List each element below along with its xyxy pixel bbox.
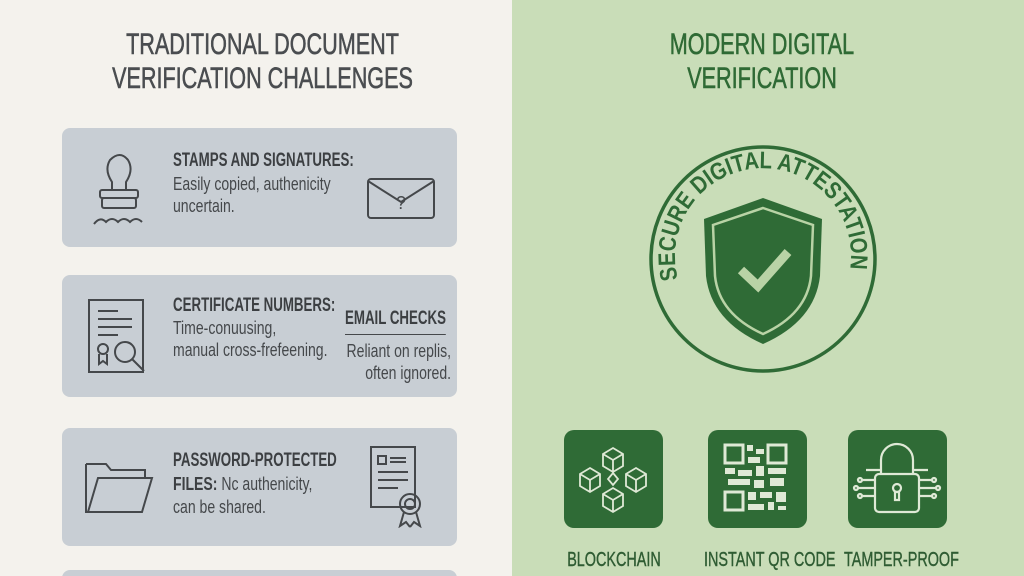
text: manual cross-frefeening.	[173, 340, 328, 360]
title: traditional: VERIFICATION CHALLENGES	[112, 62, 413, 95]
title: modern	[670, 28, 854, 95]
text: uncertain.	[173, 196, 235, 216]
card: stamps	[62, 128, 457, 247]
card: certificate numbers	[62, 275, 457, 397]
card: password	[62, 428, 457, 546]
text: FILES: Nc authenicity,	[173, 474, 312, 494]
icon: lock	[848, 430, 947, 528]
icon: envelope: ?	[396, 193, 406, 213]
icon: envelope	[367, 178, 435, 219]
panel: traditional	[0, 0, 512, 576]
icon: document badge	[370, 446, 422, 528]
heading: CERTIFICATE NUMBERS:	[173, 295, 335, 316]
label: qr: INSTANT QR CODE	[704, 549, 835, 571]
card: partial bottom	[62, 570, 457, 576]
seal	[649, 145, 877, 373]
title: traditional: TRADITIONAL DOCUMENT	[126, 28, 399, 61]
icon: folder	[85, 463, 154, 513]
icon: blockchain	[564, 430, 663, 528]
title: modern: VERIFICATION	[687, 62, 837, 95]
icon: stamp	[93, 154, 143, 225]
text: email: Reliant on replis,	[346, 341, 451, 361]
icon: certificate	[88, 299, 145, 373]
title: traditional	[112, 28, 413, 95]
heading: STAMPS AND SIGNATURES:	[173, 150, 354, 171]
panel: modern	[512, 0, 1024, 576]
icon: qr code	[708, 430, 807, 528]
text: email	[346, 341, 451, 383]
text: email: often ignored.	[365, 363, 451, 383]
text	[173, 474, 312, 517]
seal: SECURE DIGITAL ATTESTATION	[658, 152, 868, 280]
label: tamper-proof: TAMPER-PROOF	[844, 549, 959, 571]
text	[173, 174, 331, 216]
heading: PASSWORD-PROTECTED	[173, 450, 337, 471]
label: blockchain: BLOCKCHAIN	[567, 549, 661, 571]
text	[173, 318, 328, 360]
title: modern: MODERN DIGITAL	[670, 28, 854, 61]
text: can be shared.	[173, 497, 266, 517]
heading: email checks: EMAIL CHECKS	[345, 308, 446, 329]
text: Easily copied, authenicity	[173, 174, 331, 194]
text: Time-conuusing,	[173, 318, 276, 338]
